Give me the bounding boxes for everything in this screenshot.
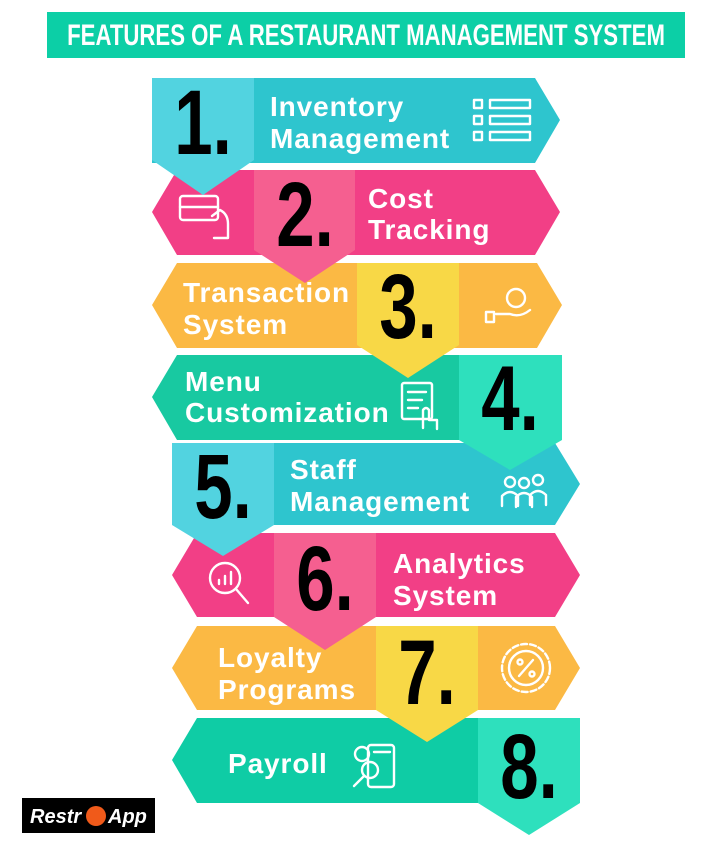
icon: list xyxy=(474,100,530,140)
band 5: staff: Staff xyxy=(290,454,357,485)
band 8: payroll xyxy=(172,715,580,835)
number box 5: 5. xyxy=(194,435,252,538)
band 1: inventory: Management xyxy=(270,123,450,154)
number box 7 xyxy=(376,621,478,742)
number box 8 xyxy=(478,715,580,835)
band 3: transaction: Transaction xyxy=(183,277,350,308)
title xyxy=(47,12,685,58)
band 6: analytics: Analytics xyxy=(393,548,526,579)
band 4: menu xyxy=(152,347,562,470)
icon: discount badge xyxy=(502,644,550,692)
band 3: transaction: System xyxy=(183,309,288,340)
icon: hand coin xyxy=(486,289,530,322)
logo: Restr xyxy=(30,806,82,828)
logo xyxy=(22,798,155,833)
number box 1: 1. xyxy=(174,71,232,174)
band 5: staff: Management xyxy=(290,486,470,517)
band 6: analytics: System xyxy=(393,580,498,611)
band 4: menu: Customization xyxy=(185,397,390,428)
band 7: loyalty: Loyalty xyxy=(218,642,322,673)
band 4: menu: Menu xyxy=(185,366,262,397)
band 5: staff xyxy=(172,435,580,556)
band 3: transaction xyxy=(152,255,562,378)
number box 8: 8. xyxy=(500,715,558,818)
number box 5 xyxy=(172,435,274,556)
logo: App xyxy=(107,806,147,828)
band 1: inventory: Inventory xyxy=(270,91,404,122)
band 2: cost tracking: Tracking xyxy=(368,214,490,245)
number box 3: 3. xyxy=(379,255,437,358)
band 6: analytics xyxy=(172,527,580,650)
band 2: cost tracking xyxy=(152,163,560,283)
band 7: loyalty xyxy=(172,621,580,742)
number box 2 xyxy=(254,163,355,283)
number box 7: 7. xyxy=(398,621,456,724)
icon: magnifier chart xyxy=(210,563,248,603)
number box 1 xyxy=(152,71,254,195)
icon: card in hand xyxy=(180,196,228,238)
number box 3 xyxy=(357,255,459,378)
number box 4: 4. xyxy=(481,347,539,450)
band 7: loyalty: Programs xyxy=(218,674,356,705)
icon: menu checklist xyxy=(402,383,437,429)
number box 4 xyxy=(459,347,562,470)
icon: staff xyxy=(502,475,546,507)
band 1: inventory xyxy=(152,71,560,195)
number box 2: 2. xyxy=(276,163,334,266)
number box 6: 6. xyxy=(296,527,354,630)
number box 6 xyxy=(274,527,376,650)
band 2: cost tracking: Cost xyxy=(368,183,434,214)
title: FEATURES OF A RESTAURANT MANAGEMENT SYSTEM xyxy=(67,18,665,52)
icon: payroll phone xyxy=(354,745,394,787)
band 8: payroll: Payroll xyxy=(228,748,328,779)
